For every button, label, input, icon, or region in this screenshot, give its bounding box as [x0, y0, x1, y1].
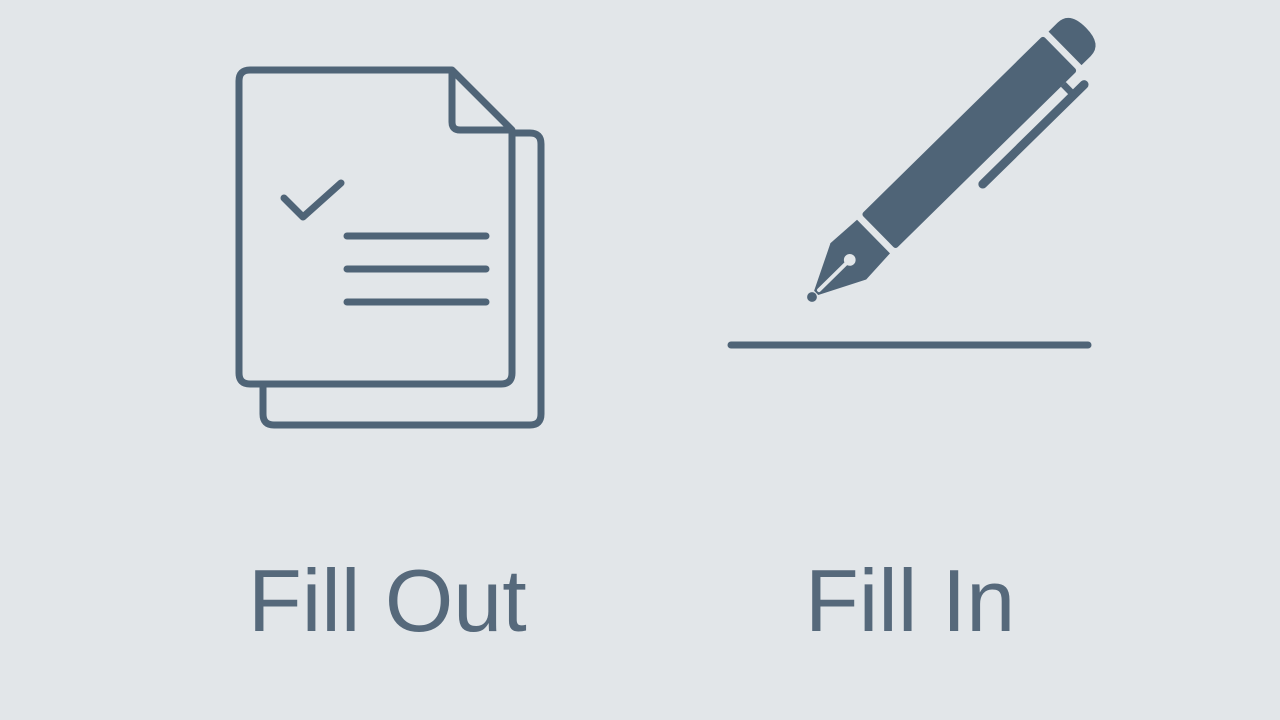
folded corner: [452, 70, 512, 130]
body: [861, 36, 1077, 249]
clip: [983, 85, 1084, 184]
nib: [798, 218, 891, 311]
label: Fill Out: Fill Out: [248, 551, 527, 650]
cap end: [1049, 11, 1102, 65]
back page: [263, 133, 541, 425]
front page: [239, 70, 512, 384]
text lines: [347, 236, 486, 302]
label: Fill In: Fill In: [805, 551, 1015, 650]
check mark: [284, 183, 341, 217]
signature line: [731, 342, 1088, 348]
